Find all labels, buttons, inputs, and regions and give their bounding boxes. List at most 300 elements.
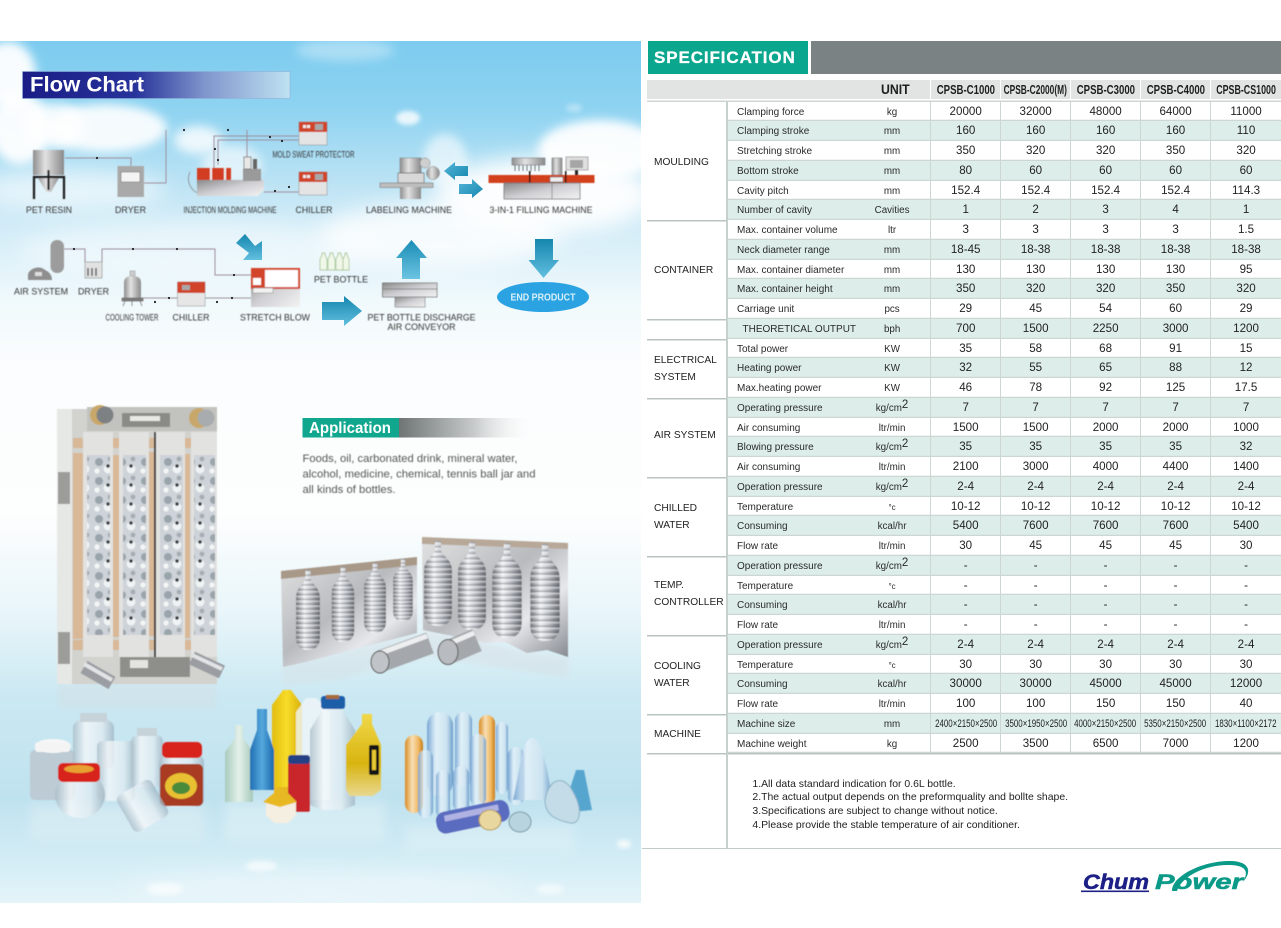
jar reflections [30, 805, 205, 840]
section: chilled water: 5400 [1233, 519, 1259, 532]
section: container: 18-38 [1021, 243, 1050, 256]
section: moulding: 20000 [950, 105, 982, 118]
section: container [647, 220, 1281, 319]
section: container: 320 [1236, 282, 1256, 295]
pipe flow markers [73, 129, 290, 303]
section: theoretical output: 700 [956, 322, 975, 335]
section: machine: Machine weight [737, 739, 806, 750]
section: chilled water: 2-4 [1027, 480, 1044, 493]
preform reflections [405, 825, 575, 853]
section: air system: 2000 [1163, 421, 1188, 434]
section: chilled water: °c [888, 503, 896, 512]
clear triangular preform [545, 781, 579, 823]
section: temp controller: Operation pressure [737, 561, 823, 572]
section: electrical system: 15 [1240, 342, 1252, 355]
section: machine: 2400×2150×2500 [935, 718, 997, 730]
section: air system: 1500 [1023, 421, 1049, 434]
icon: chiller [299, 172, 327, 195]
clear cup [115, 778, 170, 834]
section: electrical system: 78 [1029, 381, 1042, 394]
section: theoretical output: 2250 [1093, 322, 1119, 335]
icon: air dryer [85, 262, 102, 278]
section: cooling water: °c [888, 661, 896, 670]
end product oval [497, 282, 589, 312]
section: electrical system: 68 [1099, 342, 1112, 355]
icon: 3-in-1 filling machine [488, 157, 594, 199]
section: container: 320 [1096, 282, 1115, 295]
section: temp controller: - [964, 618, 968, 631]
section: electrical system: 17.5 [1235, 381, 1257, 394]
steel cylinders [371, 633, 477, 673]
section: chilled water: 5400 [953, 519, 979, 532]
section: air system: 3000 [1023, 460, 1049, 473]
clear five litre bottle [310, 708, 355, 810]
section: temp controller: CONTROLLER [654, 597, 724, 608]
section: moulding: kg [887, 107, 897, 118]
section: moulding: 160 [1026, 124, 1045, 137]
icon: injection molding machine [188, 157, 264, 196]
section: air system: 2000 [1093, 421, 1118, 434]
icon: mold sweat protector [299, 122, 327, 145]
heading: Flow Chart: Flow Chart [30, 74, 144, 96]
logo: Chum Power [1081, 861, 1248, 894]
section: cooling water: 30000 [950, 677, 982, 690]
photo: jars and containers [30, 713, 205, 840]
section: chilled water: WATER [654, 520, 690, 531]
flow chart labels: CHILLER [296, 205, 333, 216]
section: temp controller: ltr/min [879, 620, 905, 631]
section: air system: 7 [1032, 401, 1039, 414]
flow chart labels [14, 150, 592, 333]
blue cone [562, 770, 592, 813]
section: cooling water: 2-4 [1027, 638, 1044, 651]
section: temp controller: - [1174, 559, 1178, 572]
section: cooling water: Operation pressure [737, 640, 823, 651]
section: electrical system: 125 [1166, 381, 1185, 394]
text block: application description: all kinds of bottles. [302, 484, 396, 496]
text block: notes: 2.The actual output depends on the preformquality and bollte shape. [752, 792, 1068, 803]
text block: notes: 1.All data standard indication for 0.6L bottle. [752, 778, 956, 790]
section: machine: 6500 [1093, 737, 1118, 750]
section: chilled water: Consuming [737, 521, 788, 532]
left blow mold [281, 557, 417, 667]
flow chart labels: DRYER [115, 205, 146, 216]
section: air system: kg/cm2 [876, 399, 908, 414]
section: container: 130 [956, 263, 975, 276]
section: moulding: 64000 [1159, 105, 1192, 118]
section: moulding: 4 [1172, 203, 1179, 216]
section: chilled water: kg/cm2 [876, 478, 908, 493]
section: electrical system: 91 [1169, 342, 1182, 355]
section: air system: 35 [1029, 440, 1042, 453]
section: air system: 35 [1099, 440, 1112, 453]
section: cooling water: 2-4 [1097, 638, 1114, 651]
arrow: diagonal to stretch blow [236, 234, 262, 260]
blow mold reflections [283, 633, 417, 685]
section: temp controller: - [1244, 618, 1248, 631]
section: cooling water: Flow rate [737, 699, 778, 710]
section: air system: 7 [1102, 401, 1109, 414]
icon: labeling machine [380, 158, 440, 199]
section: air system: Air consuming [737, 423, 800, 434]
section: machine: 1830×1100×2172 [1215, 718, 1277, 730]
section: chilled water: Operation pressure [737, 482, 823, 493]
yellow capped cup [263, 787, 297, 823]
section: theoretical output: 1200 [1233, 322, 1259, 335]
section: electrical system: 65 [1099, 361, 1112, 374]
section: moulding: 60 [1099, 164, 1112, 177]
section: container: 130 [1026, 263, 1045, 276]
section: chilled water: 45 [1169, 539, 1182, 552]
section: electrical system: KW [884, 344, 900, 355]
table header row [647, 80, 1281, 99]
section: temp controller: - [1244, 579, 1248, 592]
section: air system [647, 398, 1281, 477]
section: air system: 7 [1243, 401, 1249, 414]
section: temp controller: - [964, 598, 968, 611]
section: temp controller: TEMP. [654, 580, 684, 591]
ring neck [509, 812, 531, 832]
section: cooling water: 2-4 [1167, 638, 1184, 651]
section: cooling water: 45000 [1159, 677, 1192, 690]
section: moulding: 80 [959, 164, 972, 177]
section: container: 3 [1172, 223, 1179, 236]
section: moulding: 60 [1240, 164, 1252, 177]
section: moulding: 152.4 [1091, 184, 1120, 197]
yellow bottle [272, 690, 302, 787]
flow chart labels: STRETCH BLOW [240, 312, 310, 324]
mold reflection [58, 684, 216, 708]
section: theoretical output: bph [884, 324, 900, 335]
section: temp controller: Temperature [737, 581, 793, 592]
section: moulding: 320 [1096, 144, 1115, 157]
section: cooling water: 150 [1166, 697, 1185, 710]
section: air system: Blowing pressure [737, 442, 814, 453]
section: electrical system: KW [884, 383, 900, 394]
section: temp controller: - [1174, 618, 1178, 631]
flow chart labels: INJECTION MOLDING MACHINE [184, 205, 276, 216]
section: chilled water: 2-4 [1167, 480, 1184, 493]
text block: notes [752, 778, 1068, 831]
section: cooling water: COOLING [654, 661, 701, 672]
section: temp controller: kg/cm2 [876, 557, 908, 572]
section: moulding: mm [884, 166, 900, 177]
clear jars middle [97, 728, 163, 801]
section: electrical system: 55 [1029, 361, 1042, 374]
cap [479, 810, 501, 830]
section: container: 3 [1032, 223, 1039, 236]
section: air system: 32 [1240, 440, 1252, 453]
flow chart labels: MOLD SWEAT PROTECTOR [272, 150, 355, 160]
section: container: 18-45 [951, 243, 980, 256]
section: air system: 4000 [1093, 460, 1118, 473]
blue bottle [250, 709, 274, 790]
section: temp controller: Consuming [737, 600, 788, 611]
arrow: labeling to filling, left [444, 162, 468, 180]
logo: Chum Power: Chum [1083, 871, 1149, 894]
section: temp controller: - [1174, 579, 1178, 592]
section: moulding: mm [884, 146, 900, 157]
section: chilled water: 7600 [1093, 519, 1118, 532]
section: container: 320 [1026, 282, 1045, 295]
section: container: 18-38 [1161, 243, 1190, 256]
section: moulding: 320 [1236, 144, 1256, 157]
panel: flow chart and application, sky background [0, 41, 641, 903]
section: container: mm [884, 245, 900, 256]
section: temp controller [647, 556, 1281, 635]
flow chart labels: 3-IN-1 FILLING MACHINE [490, 205, 592, 216]
section: temp controller: - [1104, 598, 1108, 611]
section: moulding: Cavity pitch [737, 186, 789, 197]
section: machine: kg [887, 739, 897, 750]
section: chilled water: 30 [1240, 539, 1252, 552]
section: moulding: Cavities [875, 205, 909, 216]
section: cooling water [647, 635, 1281, 714]
section: container: Max. container diameter [737, 265, 844, 276]
section: moulding: 320 [1026, 144, 1045, 157]
section: cooling water: Temperature [737, 660, 793, 671]
section: moulding: Number of cavity [737, 205, 812, 216]
section: electrical system: 58 [1029, 342, 1042, 355]
guide pins [84, 405, 222, 683]
end product oval: END PRODUCT [510, 292, 576, 304]
table header row: CPSB-C3000 [1076, 83, 1135, 97]
section: chilled water: 2-4 [1238, 480, 1254, 493]
section: electrical system: KW [884, 363, 900, 374]
heading: Application: Application [309, 420, 391, 437]
section: container: 54 [1099, 302, 1112, 315]
tall clear jar [73, 713, 114, 770]
section: cooling water: WATER [654, 678, 690, 689]
section: cooling water: kcal/hr [878, 679, 906, 690]
section: container: 29 [1240, 302, 1252, 315]
section: machine: 5350×2150×2500 [1145, 718, 1207, 730]
section: chilled water: 30 [959, 539, 972, 552]
section: chilled water: CHILLED [654, 503, 697, 514]
section: container: pcs [884, 304, 900, 315]
flow chart labels: PET BOTTLE [314, 274, 368, 286]
section: air system: 2100 [953, 460, 979, 473]
section: electrical system: 92 [1099, 381, 1112, 394]
section: machine: 3500 [1023, 737, 1049, 750]
section: moulding: 3 [1102, 203, 1109, 216]
section: chilled water: 45 [1029, 539, 1042, 552]
section: temp controller: - [1104, 618, 1108, 631]
section: air system: 7 [1172, 401, 1179, 414]
green bottle [225, 725, 253, 802]
section: moulding: 60 [1169, 164, 1182, 177]
section: container: Neck diameter range [737, 245, 830, 256]
section: container: 18-38 [1231, 243, 1261, 256]
section: moulding: 152.4 [1161, 184, 1190, 197]
section: temp controller: - [1244, 598, 1248, 611]
section: chilled water: Temperature [737, 502, 793, 513]
section: cooling water: 30 [1240, 658, 1252, 671]
section: moulding: 2 [1032, 203, 1039, 216]
icon: chiller 2 [178, 282, 205, 306]
section: chilled water: 2-4 [1097, 480, 1114, 493]
section: chilled water: 10-12 [1231, 500, 1261, 513]
section: container: 45 [1029, 302, 1042, 315]
heading: Flow Chart [22, 72, 290, 98]
section: chilled water: 7600 [1023, 519, 1049, 532]
section: electrical system: 88 [1169, 361, 1182, 374]
table header row: CPSB-C4000 [1146, 83, 1205, 97]
section: moulding: Clamping stroke [737, 126, 809, 137]
section: moulding: 32000 [1020, 105, 1052, 118]
section: theoretical output: 1500 [1023, 322, 1049, 335]
oil bottle [346, 714, 381, 796]
red bottle [288, 762, 310, 812]
section: moulding: 1 [1243, 203, 1249, 216]
section: container: Max. container height [737, 284, 833, 295]
section: container: 3 [1102, 223, 1109, 236]
section: chilled water: 10-12 [1021, 500, 1050, 513]
section: chilled water [647, 477, 1281, 556]
section: cooling water: 2-4 [1238, 638, 1254, 651]
section: temp controller: kcal/hr [878, 600, 906, 611]
square jar [30, 739, 75, 800]
section: air system: Air consuming [737, 462, 800, 473]
section: container: 60 [1169, 302, 1182, 315]
section: electrical system [647, 339, 1281, 398]
section: moulding: 152.4 [951, 184, 980, 197]
heading: SPECIFICATION [648, 41, 1281, 74]
section: temp controller: °c [888, 582, 896, 591]
section: moulding: 60 [1029, 164, 1042, 177]
section: air system: ltr/min [879, 462, 905, 473]
heading: SPECIFICATION: SPECIFICATION [654, 48, 796, 67]
section: chilled water: ltr/min [879, 541, 905, 552]
icon: PET resin silo [33, 150, 64, 199]
section: machine [647, 714, 1281, 753]
photo: blow molds and cylinders [281, 537, 568, 685]
section: cooling water: 2-4 [957, 638, 974, 651]
section: machine: 3500×1950×2500 [1005, 718, 1067, 730]
section: cooling water: 12000 [1230, 677, 1262, 690]
section: moulding: 350 [1166, 144, 1185, 157]
table header row: CPSB-CS1000 [1216, 83, 1276, 97]
section: cooling water: 30 [1029, 658, 1042, 671]
table header row: UNIT [881, 81, 910, 97]
icon: air compressor and tank [28, 240, 64, 280]
section: moulding: 160 [1166, 124, 1185, 137]
icon: air conveyor [382, 283, 437, 307]
white plates [83, 432, 217, 657]
arrow: filling to labeling, right [459, 179, 483, 198]
section: temp controller: - [964, 579, 968, 592]
section: moulding: 48000 [1089, 105, 1122, 118]
section: container: 29 [959, 302, 972, 315]
section: cooling water: 40 [1240, 697, 1252, 710]
copper strips [73, 438, 217, 650]
red lid jar right [159, 742, 204, 807]
section: moulding: 1 [962, 203, 969, 216]
section: cooling water: 30 [1099, 658, 1112, 671]
arrow: conveyor up to labeling [396, 240, 427, 279]
heading: Application [302, 418, 535, 438]
section: moulding: mm [884, 126, 900, 137]
section: container: mm [884, 265, 900, 276]
photo: preform mold [57, 405, 222, 708]
right blow mold [422, 537, 568, 657]
text block: notes: 3.Specifications are subject to change without notice. [752, 806, 998, 817]
flow chart pipes [64, 130, 299, 298]
section: moulding: Clamping force [737, 107, 804, 118]
section: electrical system: SYSTEM [654, 372, 696, 383]
section: air system: kg/cm2 [876, 438, 908, 453]
section: moulding: mm [884, 186, 900, 197]
red lid jar left [55, 763, 105, 818]
section: electrical system: Total power [737, 344, 788, 355]
flow chart labels: LABELING MACHINE [366, 205, 452, 216]
flow chart labels: PET RESIN [26, 205, 72, 216]
section: container: Carriage unit [737, 304, 794, 315]
section: chilled water: kcal/hr [878, 521, 906, 532]
flow chart labels: CHILLER [172, 312, 210, 324]
section: machine: Machine size [737, 719, 795, 730]
section: cooling water: 100 [956, 697, 975, 710]
section: air system: 35 [959, 440, 972, 453]
section: moulding [647, 102, 1281, 220]
section: container: ltr [888, 225, 896, 236]
tall preforms [405, 712, 524, 818]
section: air system: 35 [1169, 440, 1182, 453]
clear tall bottle [296, 698, 330, 800]
section: temp controller: - [1174, 598, 1178, 611]
section: container: Max. container volume [737, 225, 838, 236]
section: electrical system: 46 [959, 381, 972, 394]
flow chart labels: DRYER [78, 286, 109, 298]
text block: application description [302, 453, 536, 496]
section: chilled water: Flow rate [737, 541, 778, 552]
section: electrical system: Heating power [737, 363, 801, 374]
section: container: 350 [1166, 282, 1185, 295]
section: air system: ltr/min [879, 423, 905, 434]
section: electrical system: Max.heating power [737, 383, 822, 394]
section: cooling water: 150 [1096, 697, 1115, 710]
clear cone preform [513, 738, 552, 800]
text block: application description: alcohol, medicine, chemical, tennis ball jar and [302, 468, 536, 480]
panel: specification table [642, 41, 1281, 894]
section: cooling water: 30 [1169, 658, 1182, 671]
section: container: mm [884, 284, 900, 295]
section: machine: 4000×2150×2500 [1075, 718, 1137, 730]
section: machine: MACHINE [654, 729, 701, 740]
section: temp controller: - [1104, 579, 1108, 592]
section: air system: Operating pressure [737, 403, 823, 414]
section: chilled water: 10-12 [1161, 500, 1190, 513]
photo: bottles [225, 690, 385, 840]
section: container: 18-38 [1091, 243, 1120, 256]
section: electrical system: ELECTRICAL [654, 355, 717, 366]
section: theoretical output: THEORETICAL OUTPUT [742, 324, 856, 335]
section: moulding: Bottom stroke [737, 166, 799, 177]
flow chart labels: COOLING TOWER [106, 312, 159, 324]
text block: notes: 4.Please provide the stable temperature of air conditioner. [752, 820, 1020, 831]
section: moulding: 114.3 [1232, 184, 1260, 197]
section: chilled water: 2-4 [957, 480, 974, 493]
section: container: 3 [962, 223, 969, 236]
section: air system: 1000 [1233, 421, 1259, 434]
section: chilled water: 10-12 [951, 500, 980, 513]
section: moulding: Stretching stroke [737, 146, 812, 157]
section: temp controller: - [1034, 618, 1038, 631]
section: container: 350 [956, 282, 975, 295]
section: moulding: 11000 [1230, 105, 1262, 118]
arrow: stretch blow to conveyor [322, 296, 362, 326]
section: theoretical output: 3000 [1163, 322, 1188, 335]
